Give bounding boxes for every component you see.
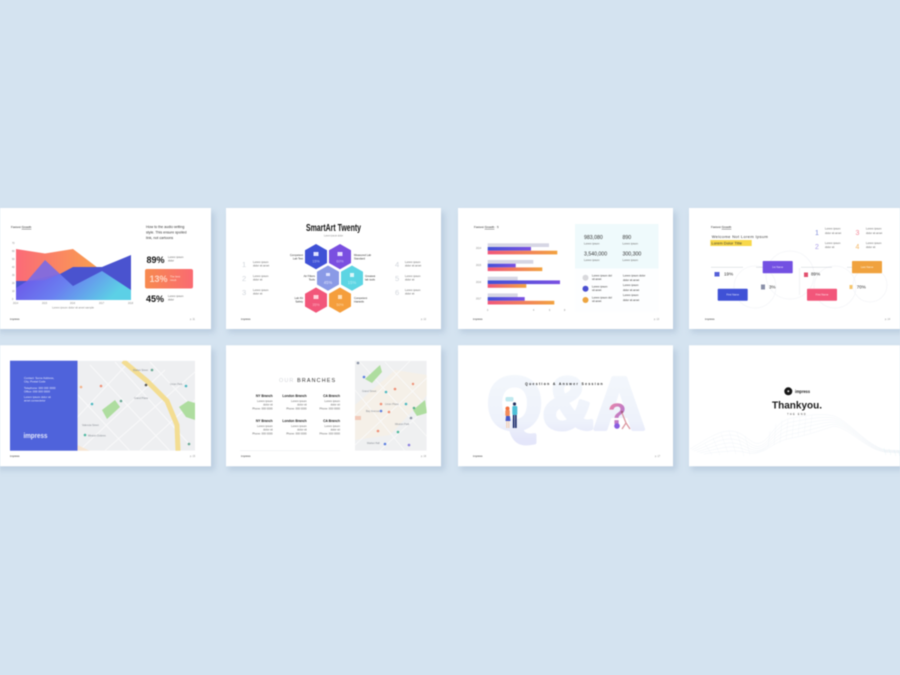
bar chart: 6 <box>549 310 551 312</box>
area chart: 2015 <box>42 303 48 305</box>
area chart: 0 <box>12 299 14 301</box>
right numbered list: Lorem ipsum <box>405 260 421 264</box>
area chart: 30 <box>12 275 15 277</box>
right numbered list: 4 <box>395 260 399 269</box>
right numbered list: Lorem ipsum <box>405 288 421 292</box>
left numbered list: dolor sit <box>253 278 263 282</box>
branch column 2: Phone: 000 0000 <box>286 406 307 410</box>
branch column 3: Phone: 000 0000 <box>320 406 340 410</box>
area chart: 60 <box>12 251 15 253</box>
branch column 2: dolor sit <box>297 402 307 406</box>
branch column 3: dolor sit <box>331 428 340 432</box>
legend: sit amet <box>592 277 602 281</box>
legend: sit amet <box>592 299 602 303</box>
right numbered list: 6 <box>395 288 399 297</box>
stats panel: Lorem ipsum <box>584 242 600 246</box>
hexagon: purple <box>329 244 351 269</box>
bar chart: 2017 <box>476 298 482 300</box>
highlighted heading <box>710 240 752 246</box>
footer: impress <box>10 317 20 321</box>
numbered notes: 1 <box>815 230 819 237</box>
slide: bar chart and stats <box>458 208 677 333</box>
branch column 2: Phone: 000 0000 <box>286 432 307 436</box>
slide: location map <box>0 345 215 470</box>
area chart: 10 <box>12 291 15 293</box>
stat: 45%: dolor <box>168 298 174 302</box>
stat: 3%: 3% <box>769 284 776 290</box>
footer: impress <box>473 317 483 321</box>
legend: Lorem ipsum <box>623 293 639 297</box>
area chart: 2017 <box>99 303 105 305</box>
illustration: question mark: ? <box>608 398 626 431</box>
branch column 1: dolor sit <box>263 402 273 406</box>
blue info panel: impress <box>24 431 48 440</box>
footer: p. 11 <box>190 319 196 321</box>
branch column 1: dolor sit <box>263 428 273 432</box>
right numbered list: dolor sit <box>405 292 415 296</box>
blue info panel: Telephone: 000 000 0000 <box>24 386 56 390</box>
map: Grand Plaza <box>134 397 149 400</box>
bar chart: 0 <box>487 310 489 312</box>
stats panel: Lorem ipsum <box>584 258 600 262</box>
branch column 3: Lorem ipsum <box>324 399 341 403</box>
hexagon: purple: 60% <box>336 260 344 264</box>
left numbered list: dolor sit <box>253 292 263 296</box>
callout: 13% <box>145 269 193 288</box>
illustration: two people <box>505 397 517 428</box>
map: Union Plaza <box>385 403 399 406</box>
branch column 1: Lorem ipsum <box>257 399 273 403</box>
numbered notes: 2 <box>815 244 819 251</box>
stats panel: 983,080 <box>584 235 603 241</box>
numbered notes: dolor sit <box>825 245 835 249</box>
stat: 19% <box>714 272 733 276</box>
pale connector arcs <box>734 251 887 308</box>
bar chart: 2015 <box>476 265 482 267</box>
stats panel: 3,540,000 <box>584 252 607 258</box>
slide: hexagon SmartArt: Lorem ipsum dolor <box>324 234 343 238</box>
numbered notes: 3 <box>856 230 860 237</box>
area chart: 50 <box>12 259 15 261</box>
stat: 70% <box>850 284 866 290</box>
numbered notes <box>815 226 882 251</box>
slide: our branches <box>226 345 445 470</box>
bar chart <box>476 243 566 312</box>
footer: impress <box>241 454 251 458</box>
box: orange: Last Name <box>861 265 874 269</box>
bar chart: 4 <box>533 310 535 312</box>
hexagon: blue: 15% <box>312 260 320 264</box>
blue info panel: Office: 000 000 0000 <box>24 390 50 394</box>
branch column 1: Phone: 000 0000 <box>252 432 273 436</box>
hexagon: orange <box>329 288 351 313</box>
hexagon: cyan: 15% <box>348 280 356 285</box>
hexagon: periwinkle: 45% <box>324 280 332 285</box>
left numbered list: 1 <box>242 260 246 269</box>
box: pink <box>807 289 837 301</box>
branch column 1: NY Branch <box>256 419 273 423</box>
area chart <box>12 243 134 310</box>
legend: Lorem ipsum dol <box>592 296 612 300</box>
numbered notes: dolor sit <box>866 245 876 249</box>
right numbered list: 5 <box>395 274 399 283</box>
branch column 3: CA Branch <box>323 419 340 423</box>
legend <box>582 274 645 303</box>
footer: p. 16 <box>421 456 427 458</box>
left numbered list: 3 <box>242 288 246 297</box>
numbered notes: Lorem ipsum <box>825 241 841 245</box>
highlighted heading: Lorem Dolor Title <box>712 242 742 246</box>
hexagon labels: Safety <box>295 300 304 304</box>
hexagon: pink <box>305 288 327 313</box>
box: purple: 1st Name <box>772 265 784 269</box>
hexagon labels: Hazards <box>354 300 365 304</box>
area chart: 2016 <box>70 303 76 305</box>
hexagon labels: Competent <box>354 296 367 300</box>
blue info panel: City, Postal Code <box>24 380 46 384</box>
stat: 89%: Lorem ipsum <box>168 255 184 259</box>
blue info panel <box>10 361 78 451</box>
legend: Lorem ipsum <box>623 283 639 287</box>
legend: sit amet <box>592 288 602 292</box>
footer <box>10 454 196 458</box>
branch column 3: dolor sit <box>331 402 340 406</box>
footer: impress <box>473 454 483 458</box>
map: Mission Dolores <box>88 434 107 438</box>
hexagon labels <box>290 253 376 304</box>
area chart: 2014 <box>13 303 19 305</box>
hexagon labels: Air Filters <box>304 274 316 278</box>
slide title: Fastest Growth <box>711 225 732 229</box>
numbered notes: Lorem ipsum <box>866 241 882 245</box>
legend: Lorem ipsum dol <box>592 274 612 278</box>
legend: dolor sit amet <box>623 288 639 292</box>
hexagon labels: Tools <box>309 278 316 282</box>
hexagon labels: Competent <box>290 253 303 257</box>
hexagon labels: Lab Kit <box>295 296 303 300</box>
area chart: 20 <box>12 283 15 285</box>
bar chart: 8 <box>564 310 566 312</box>
stats panel <box>575 224 658 312</box>
numbered notes: dolor sit amet <box>825 231 841 235</box>
branch column 1 <box>252 394 273 436</box>
map <box>70 361 195 455</box>
hexagon labels: Lab Test <box>293 256 303 260</box>
stat: 45%: Lorem ipsum <box>168 294 184 298</box>
thank you heading: Thankyou. <box>772 400 822 412</box>
footer <box>473 317 660 321</box>
box: blue: First Name <box>726 293 740 297</box>
title: SmartArt Twenty <box>306 223 361 234</box>
callout: 13%: result <box>170 278 177 282</box>
bar chart: 2014 <box>476 248 482 250</box>
right numbered list: dolor sit amet <box>405 264 421 268</box>
branch column 1: Lorem ipsum <box>257 424 273 428</box>
branch column 2: dolor sit <box>297 428 307 432</box>
box: orange <box>852 261 882 273</box>
stat: 3% <box>761 284 776 290</box>
map: Mission Park <box>395 423 410 426</box>
legend: dolor sit amet <box>623 298 639 302</box>
branch column 3: Phone: 000 0000 <box>320 432 340 436</box>
footer <box>241 317 427 321</box>
footer: p. 14 <box>885 319 891 321</box>
stat: 89%: 89% <box>811 272 820 276</box>
footer <box>473 454 661 458</box>
footer <box>705 317 891 321</box>
footer: impress <box>705 317 715 321</box>
map <box>354 360 428 450</box>
legend: dolor sit amet <box>623 278 639 282</box>
branch column 3: CA Branch <box>323 394 340 398</box>
hexagon: cyan <box>341 266 363 291</box>
footer: impress <box>241 317 251 321</box>
area chart: 2018 <box>128 303 134 305</box>
left numbered list: Lorem ipsum <box>253 274 269 278</box>
footer: p. 17 <box>655 456 661 458</box>
subheading: THE END <box>787 412 807 416</box>
callout: 13%: 13% <box>150 274 168 284</box>
branch column 2: Lorem ipsum <box>291 424 307 428</box>
left numbered list: 2 <box>242 274 246 283</box>
box: pink: First Name <box>816 293 829 297</box>
footer: p. 13 <box>654 319 660 321</box>
hexagon: blue <box>305 244 327 269</box>
logo: impress <box>795 389 810 394</box>
area chart: 40 <box>12 267 15 269</box>
hexagon labels: Greatest <box>365 274 376 278</box>
hexagon: pink: 35% <box>312 303 320 307</box>
right numbered list <box>395 260 421 297</box>
slide: area chart <box>0 208 215 333</box>
branch column 2: London Branch <box>282 394 307 398</box>
right numbered list: dolor sit <box>405 278 415 282</box>
hexagon: periwinkle <box>317 266 339 291</box>
hexagon labels: Measured Lab <box>354 253 372 257</box>
branch column 3: Lorem ipsum <box>324 424 341 428</box>
blue info panel: Contact: Some Address, <box>24 376 54 380</box>
slide title: Fastest Growth · 5 <box>474 225 499 229</box>
numbered notes: Lorem ipsum <box>825 226 841 230</box>
stats panel: 890 <box>622 235 631 241</box>
slide: Q and A <box>458 345 677 470</box>
branch column 2 <box>282 394 307 436</box>
map: Valencia Street <box>82 424 99 427</box>
footer <box>10 317 196 321</box>
stats panel: Lorem ipsum <box>622 242 639 246</box>
stats panel: Lorem ipsum <box>622 258 639 262</box>
slide: thank you <box>689 345 900 470</box>
numbered notes: 4 <box>856 244 860 251</box>
divider lines <box>711 267 852 295</box>
numbered notes: dolor sit amet <box>866 231 882 235</box>
stat: 89% <box>146 255 184 265</box>
branch column 1: NY Branch <box>256 394 273 398</box>
bar chart: 2016 <box>476 282 482 284</box>
left numbered list: Lorem ipsum <box>253 260 269 264</box>
branch column 2: London Branch <box>282 419 307 423</box>
footer: p. 12 <box>421 319 427 321</box>
logo <box>784 387 810 395</box>
box: blue <box>718 289 748 301</box>
stat: 45% <box>146 294 184 304</box>
slide: process flow <box>689 208 900 333</box>
map: Grand Street <box>362 390 377 393</box>
stat: 89% <box>804 272 820 277</box>
map: Market Street <box>133 369 148 372</box>
stat: 89%: 89% <box>146 255 165 265</box>
blue info panel: amet consectetur <box>24 398 46 402</box>
slide: area chart: style. This ensure spoiled <box>146 230 186 234</box>
left numbered list: dolor sit amet <box>253 264 269 268</box>
heading: Question & Answer Session <box>525 382 604 386</box>
branch column 3 <box>320 394 341 436</box>
hexagon: orange: 50% <box>336 303 344 307</box>
blue info panel: Lorem ipsum dolor sit <box>24 395 51 399</box>
wave mesh <box>866 441 900 454</box>
stat: 89%: dolor <box>168 258 174 262</box>
branch column 2: Lorem ipsum <box>291 399 307 403</box>
left numbered list: Lorem ipsum <box>253 288 269 292</box>
map: Union Park <box>170 383 183 386</box>
hexagon labels: Standard <box>354 256 365 260</box>
box: purple <box>763 261 793 273</box>
right numbered list: Lorem ipsum <box>405 274 421 278</box>
legend: Lorem ipsum <box>592 284 608 288</box>
slide: area chart: link, not cartoons <box>146 236 173 240</box>
slide title: Fastest Growth <box>11 225 32 229</box>
footer: p. 15 <box>190 456 196 458</box>
map: Bay Avenue <box>366 410 380 413</box>
stat: 70%: 70% <box>857 284 866 290</box>
stat: 19%: 19% <box>724 272 733 276</box>
legend: Lorem ipsum dolor <box>623 274 645 278</box>
callout: 13%: The best <box>170 274 180 278</box>
description text: How to the audio writing <box>146 225 184 229</box>
footer: impress <box>10 454 20 458</box>
big Q&A letters: Q&A <box>487 362 645 445</box>
footer <box>241 454 427 458</box>
hexagon labels: lab tools <box>365 278 376 282</box>
heading: OUR BRANCHES <box>279 378 336 384</box>
left numbered list <box>242 260 269 297</box>
slide: hexagon SmartArt <box>226 208 445 333</box>
area chart: 70 <box>12 243 15 245</box>
branch column 1: Phone: 000 0000 <box>252 406 273 410</box>
map: Market Hall <box>367 442 380 445</box>
area chart: Lorem ipsum dolor sit amet sample <box>52 306 94 310</box>
stats panel: 300,300 <box>622 252 641 258</box>
stat: 45%: 45% <box>146 294 164 304</box>
heading: Welcome Not Lorem Ipsum <box>712 234 768 239</box>
numbered notes: Lorem ipsum <box>866 226 882 230</box>
